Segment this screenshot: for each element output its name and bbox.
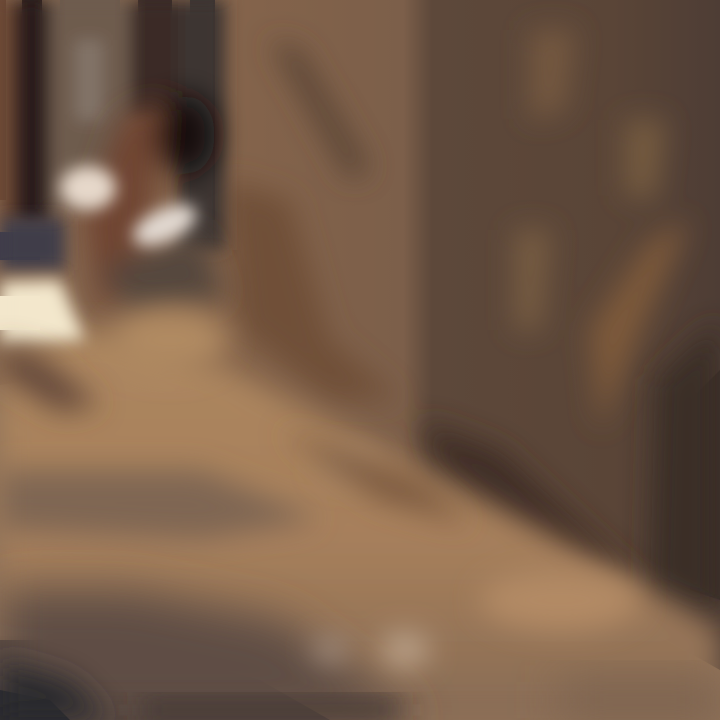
bottom right floor shade	[560, 680, 720, 720]
wall texture	[225, 30, 690, 590]
dark subject patch	[85, 95, 225, 320]
floor	[0, 330, 720, 720]
pale floor spots	[312, 570, 640, 668]
floor shadows	[0, 345, 470, 540]
warm mound near subject	[112, 308, 380, 480]
white highlight	[0, 280, 85, 345]
dark lower right wall	[650, 320, 720, 620]
dark bottom left floor	[0, 590, 420, 720]
blue grey strip	[0, 218, 65, 270]
background left doorway	[0, 0, 225, 250]
white highlights on subject	[60, 166, 203, 254]
